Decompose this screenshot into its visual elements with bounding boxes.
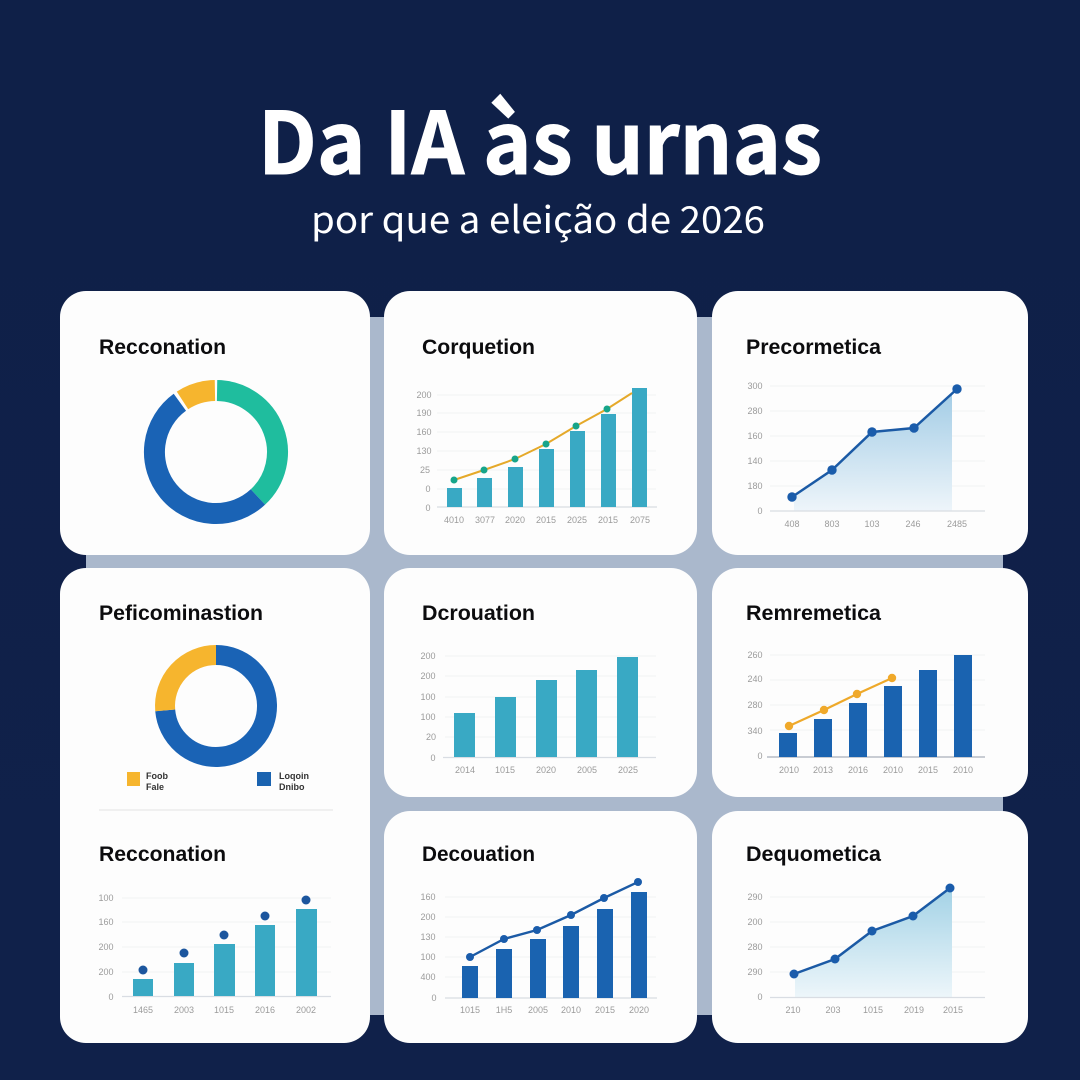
panel heading: Corquetion: [422, 336, 535, 359]
combo chart: 0: [431, 993, 437, 1003]
panel: Dequometica area chart: [712, 811, 1028, 1043]
combo chart: 4010: [444, 515, 464, 525]
bar chart: 100: [420, 692, 436, 702]
combo chart: 200: [420, 912, 436, 922]
combo chart: 2010: [779, 765, 799, 775]
panel: Corquetion bar and line: [384, 291, 697, 555]
combo chart: [747, 650, 985, 775]
bar chart: 20: [426, 732, 436, 742]
combo chart: 2005: [528, 1005, 548, 1015]
bar chart: 2025: [618, 765, 638, 775]
area line chart: 2019: [904, 1005, 924, 1015]
panel: Peficominastion and Recconation tall card: [60, 568, 370, 1043]
bar chart with dots: 160: [98, 917, 114, 927]
combo chart: 2015: [536, 515, 556, 525]
panel: Decouation bar and line: [384, 811, 697, 1043]
bar chart: 2020: [536, 765, 556, 775]
combo chart: 340: [747, 726, 763, 736]
legend: Dnibo: [279, 782, 305, 792]
area line chart: 140: [747, 456, 763, 466]
combo chart: 0: [425, 503, 431, 513]
panel: Precormetica area chart: [712, 291, 1028, 555]
combo chart: 25: [420, 465, 430, 475]
combo chart: 130: [416, 446, 432, 456]
area line chart: 180: [747, 481, 763, 491]
area line chart: 408: [784, 519, 800, 529]
area line chart: 2015: [943, 1005, 963, 1015]
combo chart: 2015: [598, 515, 618, 525]
combo chart: 280: [747, 700, 763, 710]
bar chart with dots: 2003: [174, 1005, 194, 1015]
combo chart: 2020: [629, 1005, 649, 1015]
panel heading: Remremetica: [746, 602, 881, 625]
panel heading: Dequometica: [746, 843, 881, 866]
bar chart with dots: 200: [98, 967, 114, 977]
combo chart: 2010: [953, 765, 973, 775]
combo chart: 2013: [813, 765, 833, 775]
bar chart: 2005: [577, 765, 597, 775]
donut chart: [154, 391, 277, 514]
panel: Recconation donut: [60, 291, 370, 555]
combo chart: 2010: [561, 1005, 581, 1015]
panel heading: Peficominastion: [99, 602, 263, 625]
bar chart: 2014: [455, 765, 475, 775]
combo chart: 2010: [883, 765, 903, 775]
legend: Loqoin: [279, 771, 309, 781]
bar chart: 200: [420, 651, 436, 661]
bar chart with dots: [98, 893, 331, 1015]
area line chart: 280: [747, 406, 763, 416]
combo chart: 1015: [460, 1005, 480, 1015]
panel: Remremetica bar and line: [712, 568, 1028, 797]
combo chart: 0: [757, 751, 763, 761]
donut chart: [165, 655, 267, 757]
bar chart: 1015: [495, 765, 515, 775]
legend: Fale: [146, 782, 164, 792]
area line chart: 803: [824, 519, 840, 529]
combo chart: 2025: [567, 515, 587, 525]
combo chart: 0: [425, 484, 431, 494]
combo chart: 2020: [505, 515, 525, 525]
legend: [127, 771, 309, 792]
bar chart with dots: 1465: [133, 1005, 153, 1015]
title: Da IA às urnas: [258, 74, 822, 199]
combo chart: [416, 388, 657, 525]
combo chart: 160: [416, 427, 432, 437]
combo chart: 260: [747, 650, 763, 660]
combo chart: 1H5: [496, 1005, 512, 1015]
area line chart: 160: [747, 431, 763, 441]
bar chart: 0: [430, 753, 436, 763]
combo chart: 190: [416, 408, 432, 418]
combo chart: 400: [420, 972, 436, 982]
area line chart: [747, 381, 985, 529]
legend: Foob: [146, 771, 168, 781]
area line chart: 210: [785, 1005, 801, 1015]
combo chart: 200: [416, 390, 432, 400]
bar chart with dots: 0: [108, 992, 114, 1002]
combo chart: 100: [420, 952, 436, 962]
bar chart: 200: [420, 671, 436, 681]
bar chart with dots: 1015: [214, 1005, 234, 1015]
area line chart: 290: [747, 892, 763, 902]
combo chart: 3077: [475, 515, 495, 525]
subtitle: por que a eleição de 2026: [311, 190, 765, 244]
bar chart with dots: 2016: [255, 1005, 275, 1015]
combo chart: 2016: [848, 765, 868, 775]
area line chart: 2485: [947, 519, 967, 529]
combo chart: [420, 878, 657, 1015]
combo chart: 240: [747, 674, 763, 684]
area line chart: 103: [864, 519, 880, 529]
bar chart: 100: [420, 712, 436, 722]
panel heading: Precormetica: [746, 336, 881, 359]
area line chart: 0: [757, 506, 763, 516]
area line chart: 203: [825, 1005, 841, 1015]
area line chart: 280: [747, 942, 763, 952]
combo chart: 2015: [595, 1005, 615, 1015]
combo chart: 2075: [630, 515, 650, 525]
bar chart with dots: 2002: [296, 1005, 316, 1015]
panel heading: Decouation: [422, 843, 535, 866]
panel heading: Recconation: [99, 336, 226, 359]
bar chart with dots: 200: [98, 942, 114, 952]
combo chart: 2015: [918, 765, 938, 775]
area line chart: 0: [757, 992, 763, 1002]
panel: Dcrouation bar chart: [384, 568, 697, 797]
area line chart: [747, 884, 985, 1015]
backing panel: [86, 317, 1003, 1015]
panel heading: Dcrouation: [422, 602, 535, 625]
combo chart: 160: [420, 892, 436, 902]
area line chart: 200: [747, 917, 763, 927]
bar chart with dots: 100: [98, 893, 114, 903]
area line chart: 1015: [863, 1005, 883, 1015]
area line chart: 290: [747, 967, 763, 977]
area line chart: 300: [747, 381, 763, 391]
bar chart: [420, 651, 656, 775]
panel heading: Recconation: [99, 843, 226, 866]
combo chart: 130: [420, 932, 436, 942]
area line chart: 246: [905, 519, 921, 529]
